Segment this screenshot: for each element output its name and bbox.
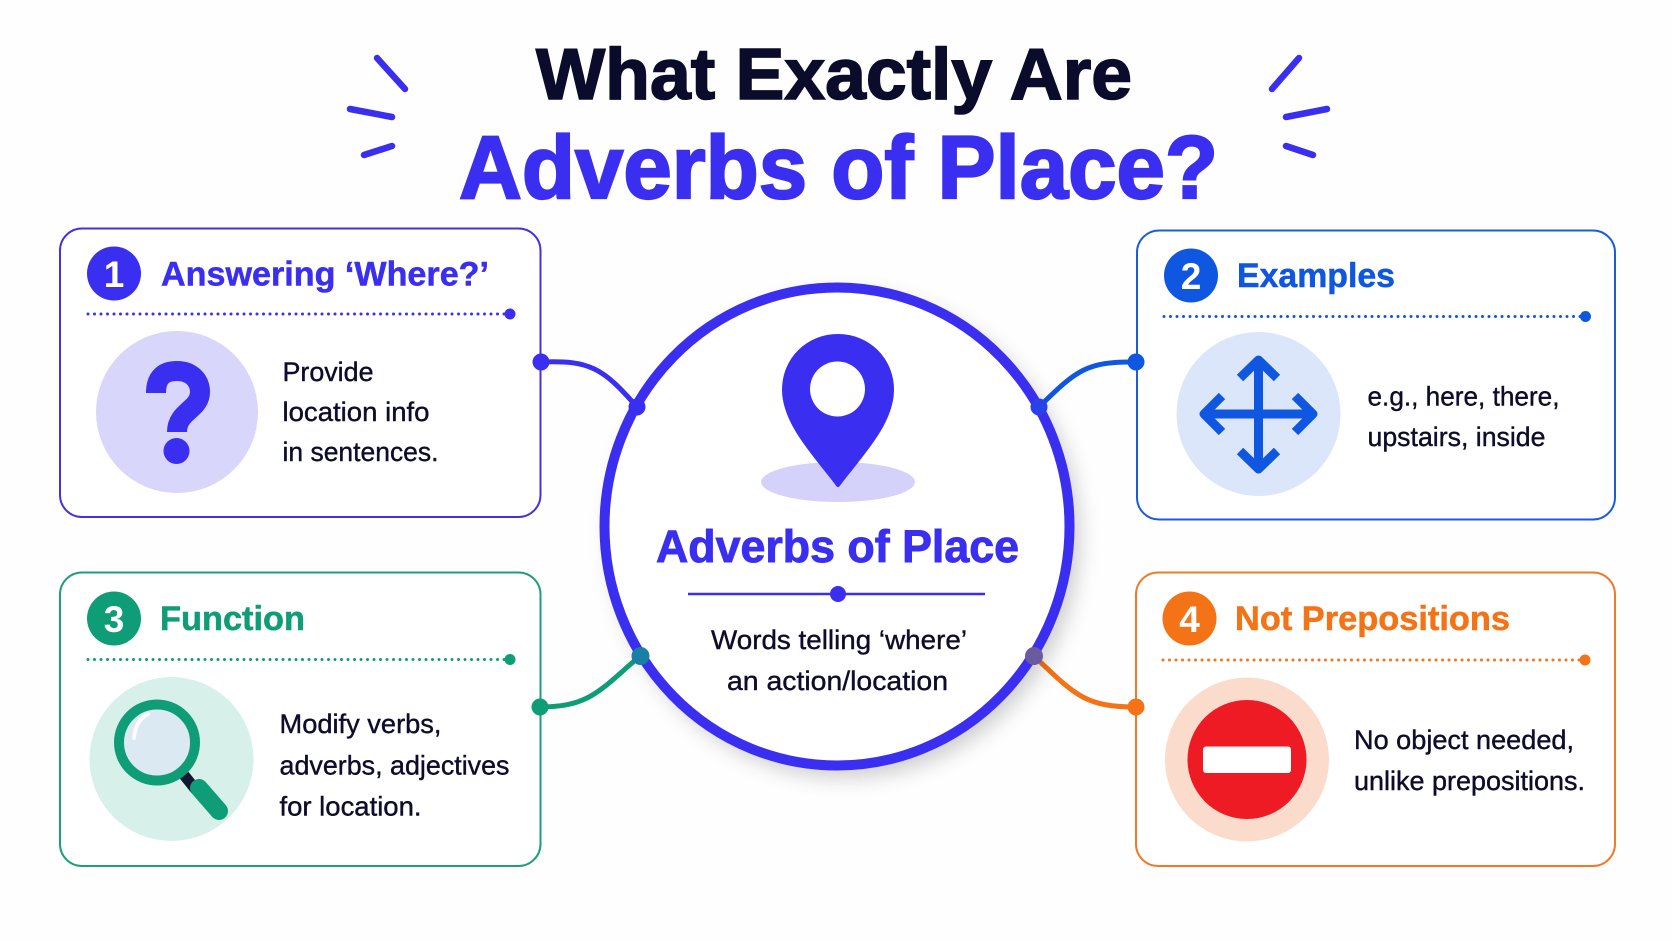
hub description: an action/location xyxy=(727,666,948,696)
hub heading: Adverbs of Place xyxy=(656,521,1019,572)
text: examples body: e.g., here, there, xyxy=(1368,382,1560,412)
badge 1 xyxy=(87,246,141,300)
dotted divider 1 xyxy=(88,308,516,320)
hub description xyxy=(711,625,967,696)
connector: card 2 to hub xyxy=(1039,354,1144,407)
connector: card 3 to hub xyxy=(532,656,640,716)
title: Adverbs of Place? xyxy=(459,117,1218,217)
icon: left spark lines xyxy=(350,58,405,155)
panel: examples xyxy=(1137,230,1615,520)
connector: card 4 to hub xyxy=(1034,656,1144,716)
icon: location pin xyxy=(761,336,915,502)
text: function body: for location. xyxy=(280,792,422,822)
connector: card 1 to hub xyxy=(532,354,637,407)
text: function body xyxy=(280,709,510,822)
text: not prepositions body xyxy=(1354,725,1585,796)
panel: answering where xyxy=(60,228,540,517)
panel: function xyxy=(60,572,540,866)
text: not prepositions body: No object needed, xyxy=(1354,725,1574,755)
badge 3 xyxy=(87,592,141,646)
badge 2: 2 xyxy=(1181,256,1201,297)
dotted divider 2 xyxy=(1164,311,1591,322)
badge 4: 4 xyxy=(1179,599,1200,640)
heading: not prepositions: Not Prepositions xyxy=(1235,600,1510,638)
text: function body: Modify verbs, xyxy=(280,709,442,739)
dotted divider 4 xyxy=(1163,654,1590,666)
text: answering where body xyxy=(282,357,438,467)
text: examples body: upstairs, inside xyxy=(1368,422,1546,452)
dotted divider 3 xyxy=(88,654,516,665)
text: answering where body: Provide xyxy=(282,357,374,387)
hub description: Words telling ‘where’ xyxy=(711,625,967,655)
hub divider xyxy=(688,586,985,602)
badge 2 xyxy=(1164,248,1218,302)
icon: four-way arrows xyxy=(1176,332,1340,496)
badge 4 xyxy=(1162,592,1216,646)
text: answering where body: in sentences. xyxy=(282,437,438,467)
hub connection nodes xyxy=(628,398,1048,665)
heading: answering where: Answering ‘Where?’ xyxy=(161,256,489,294)
icon: right spark lines xyxy=(1272,58,1327,155)
icon: no entry sign xyxy=(1165,678,1329,842)
title xyxy=(459,35,1218,217)
heading: examples: Examples xyxy=(1237,257,1395,295)
text: examples body xyxy=(1368,382,1560,452)
central hub circle xyxy=(604,288,1079,777)
icon: magnifying glass xyxy=(90,677,254,841)
badge 3: 3 xyxy=(104,599,124,640)
icon: question mark xyxy=(96,331,258,493)
text: not prepositions body: unlike prepositions. xyxy=(1354,766,1585,796)
heading: function: Function xyxy=(160,600,305,638)
title: What Exactly Are xyxy=(536,35,1132,115)
panel: not prepositions xyxy=(1136,572,1615,866)
badge 1: 1 xyxy=(104,254,124,295)
text: answering where body: location info xyxy=(282,397,430,427)
text: function body: adverbs, adjectives xyxy=(280,750,510,780)
